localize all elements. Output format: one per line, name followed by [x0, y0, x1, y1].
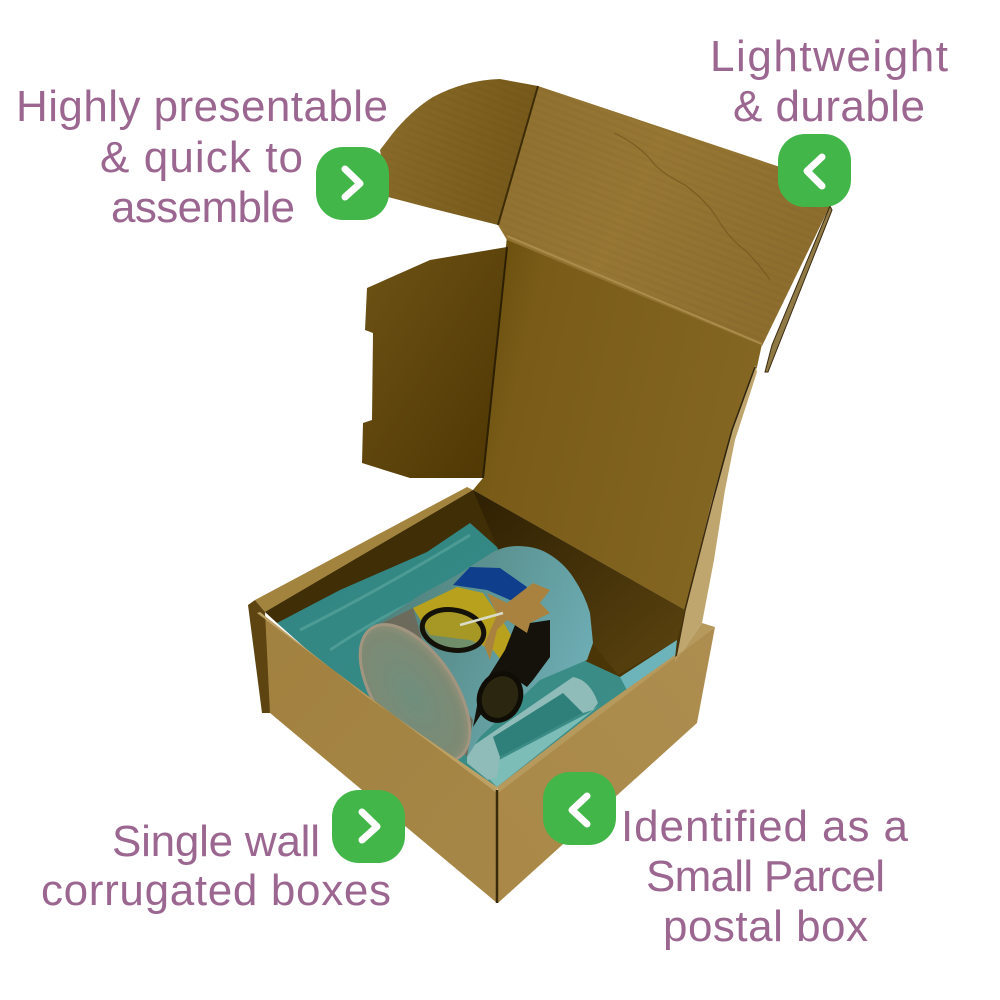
icon: left chevron badge: [778, 134, 851, 207]
back inner panel: [473, 236, 762, 610]
label text: & durable: [733, 82, 925, 131]
product photo: open cardboard box with mug: [248, 79, 832, 903]
dark rider silhouette: [473, 620, 550, 727]
label text: Identified as a: [621, 802, 909, 851]
label text: postal box: [663, 902, 868, 951]
mug handle: [467, 677, 598, 780]
label text: [16, 82, 388, 232]
label text: & quick to: [100, 133, 303, 182]
label text: Single wall: [112, 817, 320, 866]
icon: left chevron badge: [543, 772, 616, 845]
blue sky print: [453, 567, 527, 603]
icon: right chevron badge: [332, 790, 405, 863]
label text: Lightweight: [710, 32, 948, 81]
mug base: [338, 606, 492, 780]
label text: Small Parcel: [646, 852, 885, 901]
callout: highly presentable: [16, 82, 389, 232]
left rim top: [255, 487, 473, 612]
front rim: [257, 612, 497, 793]
lid side edge: [765, 206, 832, 372]
box interior base: [265, 490, 685, 787]
grey ground print: [368, 608, 473, 757]
mug with cyclist print: [338, 546, 598, 780]
inside rear wall: [473, 490, 685, 675]
label text: Highly presentable: [16, 82, 388, 131]
top left tab flap: [380, 79, 538, 225]
icon: right chevron badge: [316, 147, 389, 220]
label text: [710, 32, 948, 131]
yellow hill print: [413, 587, 530, 680]
left inner flap: [362, 247, 507, 478]
callout: single wall corrugated: [41, 790, 405, 915]
inside left wall: [265, 490, 497, 623]
left corner edge: [248, 600, 270, 713]
front left face of box: [257, 613, 497, 903]
right rim: [497, 623, 715, 793]
open lid panel: [498, 86, 830, 346]
rear bicycle wheel: [472, 667, 528, 727]
label text: assemble: [111, 183, 295, 232]
bicycle frame: [460, 613, 503, 625]
label text: corrugated boxes: [41, 866, 391, 915]
front right face of box: [498, 627, 715, 903]
mug body: [368, 546, 593, 757]
label text: [41, 817, 391, 915]
callout: lightweight and durable: [710, 32, 948, 207]
label text: [621, 802, 909, 951]
front bicycle wheel: [419, 605, 487, 655]
front corner seam: [496, 790, 498, 903]
callout: small parcel postal box: [543, 772, 909, 951]
rider body: [484, 583, 550, 660]
tissue paper: [277, 523, 677, 787]
light outer lid edge: [675, 365, 757, 662]
